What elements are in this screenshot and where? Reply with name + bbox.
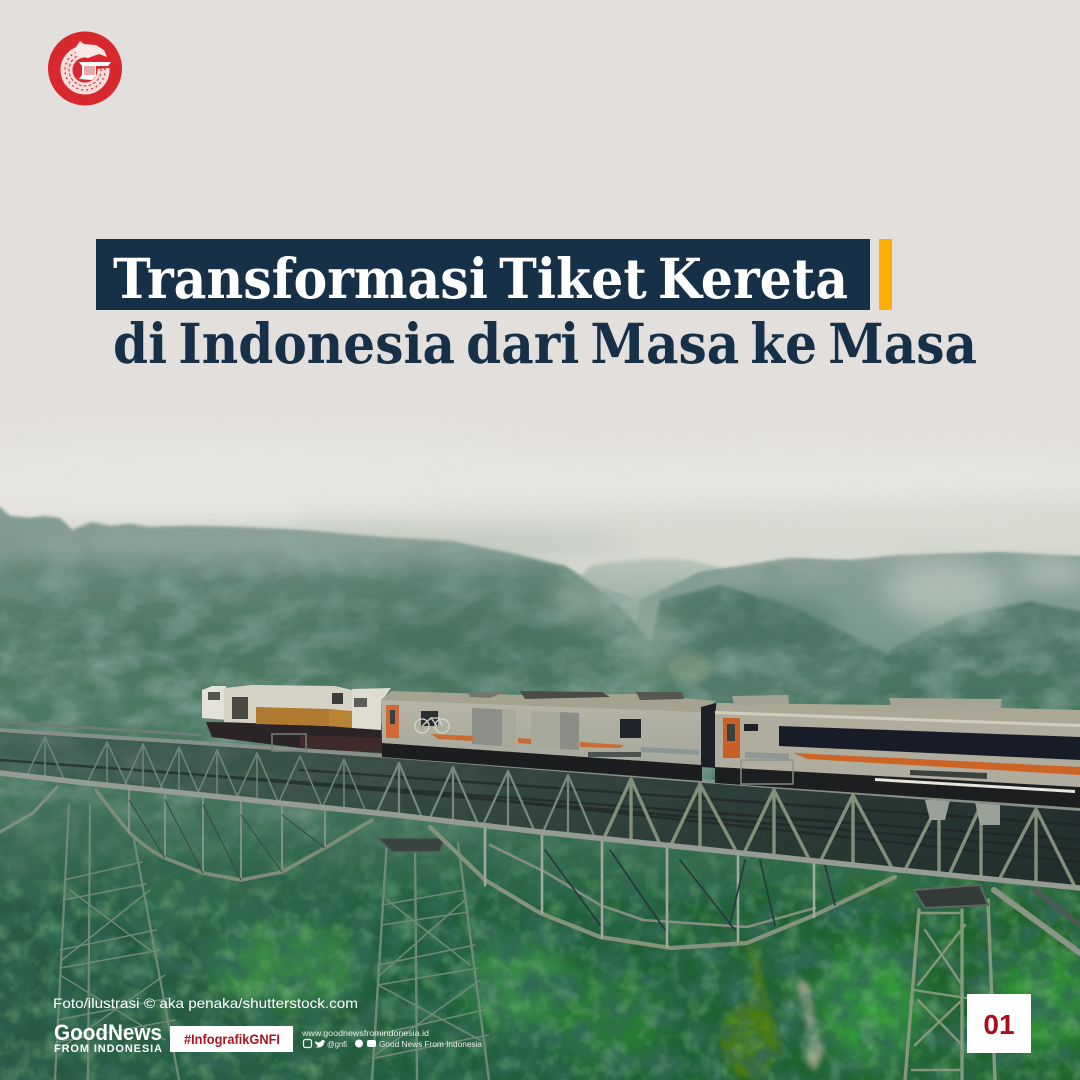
photo: green forest valley <box>0 780 1080 1080</box>
logo G bar <box>79 62 111 80</box>
logo bird head <box>74 41 107 58</box>
page number <box>967 994 1031 1053</box>
icon: twitter <box>315 1040 325 1048</box>
hashtag label: #InfografikGNFI <box>184 1032 280 1047</box>
website and social handles <box>301 1028 482 1049</box>
truss dark bracing <box>0 760 1080 862</box>
title line one: Transformasi Tiket Kereta <box>113 246 848 311</box>
logo ring <box>65 50 105 90</box>
truss frames left <box>26 737 366 812</box>
lower chord <box>0 773 1080 888</box>
coach one <box>381 691 716 781</box>
truss frames centre <box>376 763 594 836</box>
title line two: di Indonesia dari Masa ke Masa <box>113 311 977 376</box>
pier: middle tower <box>372 838 489 1080</box>
train <box>202 685 1080 808</box>
coach two <box>715 695 1080 808</box>
arch one with hangers <box>96 787 372 880</box>
icon: youtube <box>367 1040 376 1047</box>
pier: left tower <box>55 805 179 1080</box>
locomotive <box>202 685 391 753</box>
icon: facebook <box>355 1040 363 1048</box>
truss frames right <box>604 779 1074 885</box>
hashtag label <box>170 1026 293 1052</box>
arch two with hangers <box>430 826 895 948</box>
top chord <box>0 730 1080 809</box>
website and social handles: www.goodnewsfromindonesia.id <box>301 1028 429 1038</box>
photo credit: Foto/ilustrasi © aka penaka/shutterstock.com <box>53 995 358 1011</box>
left small arch <box>0 787 57 832</box>
right arch <box>994 890 1080 953</box>
background sky and fog <box>0 0 1080 600</box>
bicycle icon <box>415 711 449 733</box>
GoodNews logotype: FROM INDONESIA <box>54 1043 162 1055</box>
bridge truss <box>0 722 1080 1080</box>
title highlight bar <box>96 239 870 310</box>
website and social handles: Good News From Indonesia <box>379 1039 482 1049</box>
yellow accent bar <box>879 239 892 310</box>
GoodNews logotype: GoodNews <box>54 1020 162 1045</box>
icon: instagram <box>304 1040 312 1048</box>
page number: 01 <box>983 1009 1015 1040</box>
website and social handles: @gnfi <box>327 1039 347 1049</box>
coupling gap <box>701 703 716 768</box>
photo: misty hills <box>0 500 1080 904</box>
GoodNews logotype <box>54 1020 162 1055</box>
logo <box>48 32 122 106</box>
pier: right tower <box>905 885 995 1080</box>
